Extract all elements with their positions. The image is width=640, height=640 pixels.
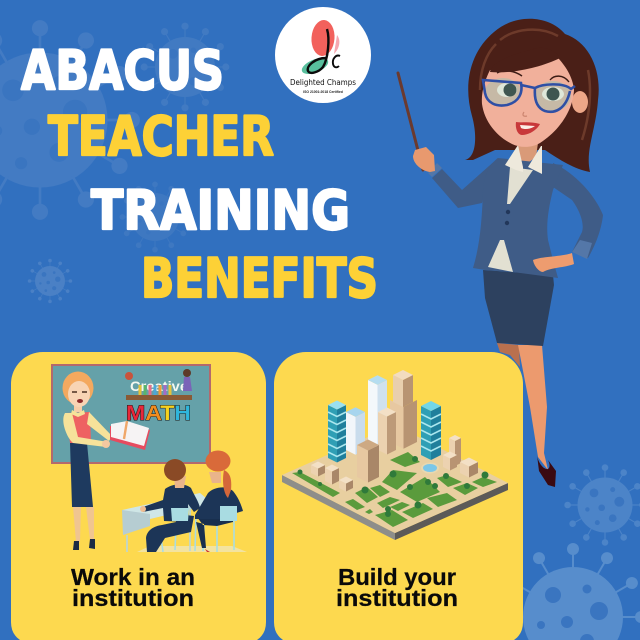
jacket buttons bbox=[505, 210, 510, 225]
hand on hip bbox=[533, 253, 574, 272]
right arm bbox=[553, 163, 603, 258]
small tan buildings right bbox=[443, 435, 478, 478]
eyebrows bbox=[497, 71, 569, 82]
teal tower right bbox=[421, 401, 441, 460]
ear bbox=[572, 91, 588, 113]
back leg bbox=[497, 343, 520, 367]
face bbox=[482, 57, 574, 147]
hair fringe bbox=[490, 48, 560, 72]
teacher character bbox=[398, 19, 603, 487]
title: ABACUS bbox=[21, 39, 224, 102]
skirt bbox=[483, 270, 554, 346]
glasses frame bbox=[483, 80, 575, 112]
tan tower mid bbox=[378, 408, 396, 454]
head bbox=[482, 57, 588, 147]
tan skyscraper bbox=[390, 370, 417, 449]
teacher bbox=[62, 372, 112, 550]
front leg bbox=[518, 345, 548, 470]
right cuff bbox=[572, 240, 592, 259]
shoe bbox=[537, 455, 556, 487]
title: BENEFITS bbox=[141, 247, 378, 310]
label: build your institution: institution bbox=[336, 585, 458, 611]
logo: Delighted Champs: ISO 21001:2018 Certified bbox=[303, 90, 343, 94]
city base bbox=[282, 425, 508, 540]
small tan buildings left bbox=[311, 462, 353, 492]
tan tower front bbox=[357, 440, 379, 482]
chalkboard bbox=[52, 365, 210, 463]
chalkboard: Creative bbox=[130, 378, 188, 394]
white tower tall bbox=[368, 375, 387, 448]
label: work in an institution bbox=[71, 564, 195, 611]
hair highlights bbox=[480, 30, 590, 140]
label: build your institution bbox=[336, 564, 458, 611]
panel: build your institution bbox=[274, 352, 523, 640]
label: work in an institution: institution bbox=[72, 585, 194, 611]
title: TEACHER bbox=[48, 105, 274, 168]
label: work in an institution: Work in an bbox=[71, 564, 195, 590]
classroom illustration bbox=[52, 365, 247, 552]
pointer stick bbox=[398, 73, 423, 170]
desk and floor bbox=[122, 493, 247, 552]
chalkboard: MATH bbox=[126, 402, 191, 425]
towers bbox=[311, 370, 478, 492]
lawns bbox=[292, 452, 497, 527]
collar bbox=[505, 145, 542, 174]
isometric city illustration bbox=[282, 370, 508, 540]
lenses bbox=[485, 78, 521, 106]
title: TRAINING bbox=[91, 179, 350, 242]
panel: work in an institution bbox=[11, 352, 266, 640]
nose bbox=[523, 112, 527, 116]
teal tower left bbox=[328, 400, 346, 462]
trees bbox=[298, 456, 488, 517]
jacket bbox=[473, 158, 563, 278]
title bbox=[21, 39, 378, 310]
label: build your institution: Build your bbox=[338, 564, 456, 590]
white tower mid bbox=[346, 407, 365, 455]
neck bbox=[518, 143, 538, 167]
logo: Delighted Champs: Delighted Champs bbox=[290, 78, 356, 87]
eyes bbox=[497, 83, 517, 97]
pointing hand bbox=[413, 147, 435, 172]
student: boy bbox=[140, 459, 200, 552]
logo: Delighted Champs bbox=[275, 7, 371, 103]
hair back bbox=[465, 19, 599, 172]
left cuff bbox=[428, 163, 442, 177]
left arm bbox=[432, 158, 498, 208]
lips bbox=[516, 122, 540, 135]
shirt bbox=[488, 167, 533, 272]
student: girl bbox=[195, 450, 243, 552]
fountain bbox=[421, 462, 439, 474]
open book bbox=[110, 421, 150, 450]
